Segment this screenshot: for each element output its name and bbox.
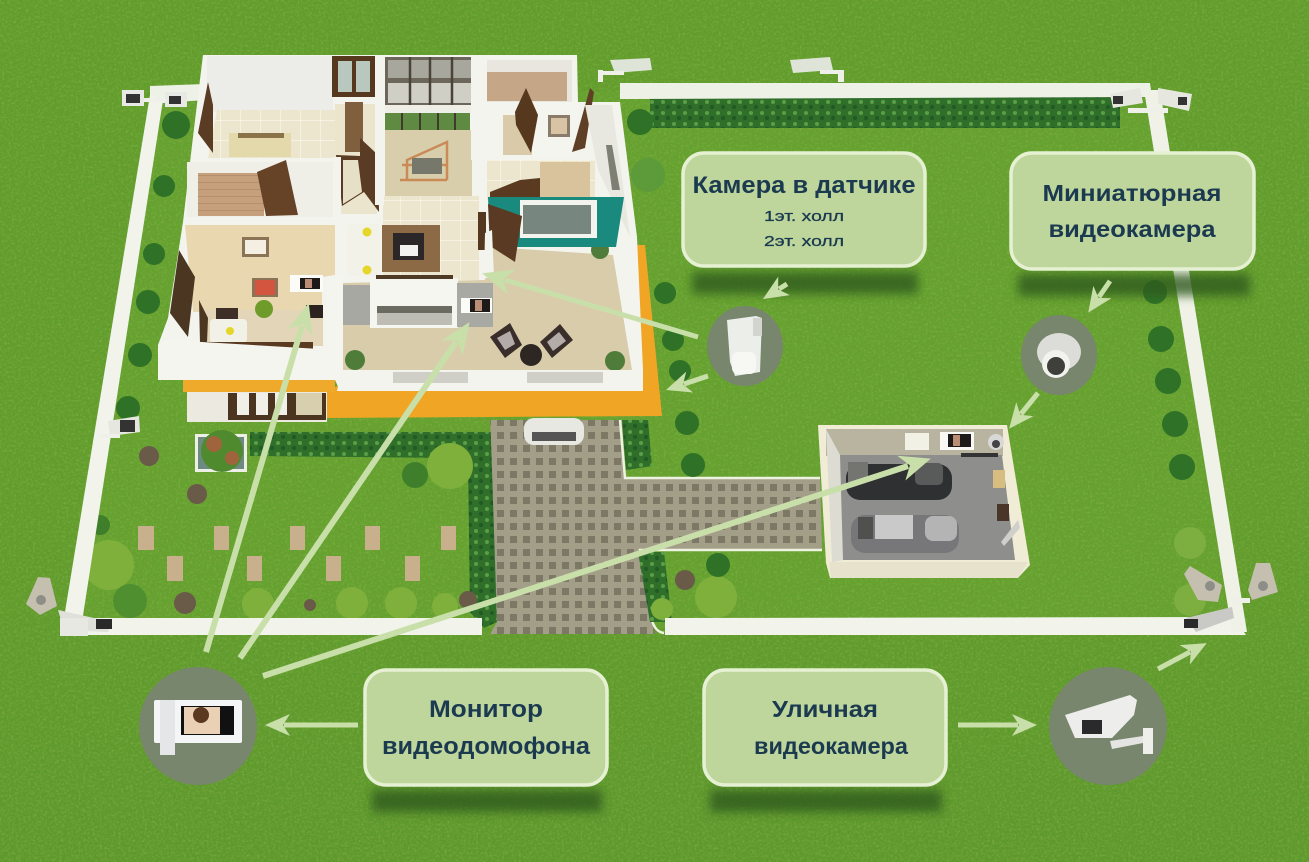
- video monitor: [290, 275, 323, 292]
- callout line 1: 1эт. холл: [764, 208, 844, 225]
- icon: sensor camera circle: [707, 306, 783, 386]
- bedroom wall: [207, 56, 333, 112]
- callout shadows: [372, 272, 1250, 812]
- arrow: street label to fence: [1158, 652, 1190, 669]
- arrow: monitor to garage: [263, 466, 908, 676]
- garden rocks: [139, 446, 477, 614]
- picture: [548, 115, 570, 137]
- callout line 2: 2эт. холл: [764, 233, 844, 250]
- teal wall: [488, 197, 624, 247]
- wall panels: [393, 372, 603, 383]
- hall floor: [383, 196, 479, 280]
- right room floor: [487, 160, 595, 200]
- flower bed: [195, 430, 247, 472]
- left door: [198, 82, 213, 153]
- dome: [1037, 333, 1081, 378]
- open door: [336, 138, 379, 212]
- grey block: [457, 283, 493, 327]
- wall: [185, 225, 335, 312]
- red picture: [252, 278, 278, 297]
- camera: bottom right: [1184, 563, 1278, 632]
- callout heading line 2: видеодомофона: [382, 733, 591, 760]
- back wall: [826, 429, 1003, 456]
- bath interior: [503, 115, 532, 155]
- driveway hedges: [622, 420, 672, 622]
- callout heading line 1: Миниатюрная: [1042, 180, 1222, 206]
- monitor device: [154, 700, 242, 755]
- mini camera: [988, 434, 1004, 450]
- outer door: [488, 204, 522, 262]
- window glass: [523, 205, 591, 234]
- bicycle: [961, 453, 998, 457]
- sofa: [347, 224, 380, 276]
- terrace: [327, 241, 643, 391]
- side wall interior: [585, 105, 630, 237]
- stair landing: [412, 158, 442, 174]
- window: [332, 56, 376, 97]
- callout: street camera: [704, 670, 946, 785]
- dark car: [846, 462, 952, 500]
- stepping stones: [138, 526, 456, 581]
- front garden: [84, 430, 497, 628]
- ground floor: [187, 390, 327, 422]
- orange plinth: [325, 245, 662, 418]
- parked car under house: [524, 418, 584, 445]
- arrow: monitor to terrace: [240, 342, 456, 658]
- fence: [62, 83, 1247, 635]
- upper window: [385, 57, 475, 105]
- garage: [818, 425, 1030, 578]
- staircase: [385, 130, 472, 196]
- house: [158, 55, 662, 445]
- arrow: label to monitor: [284, 722, 358, 728]
- camera housing: [1065, 695, 1153, 754]
- icon: dome camera circle: [1021, 315, 1097, 395]
- bushes: [116, 109, 1206, 620]
- paved driveway: [490, 420, 822, 634]
- bath floor: [487, 72, 567, 101]
- room: central passage: [335, 102, 379, 214]
- house shell: [158, 55, 643, 391]
- plant: [255, 300, 273, 318]
- boxes: [993, 470, 1020, 546]
- floor: [203, 310, 323, 346]
- video monitor: [940, 432, 974, 450]
- arrow: label to dome camera: [1099, 281, 1110, 297]
- fenced lawn: [66, 90, 1245, 628]
- door: [515, 88, 538, 153]
- video monitor: [461, 298, 492, 313]
- railing: [400, 142, 447, 180]
- partition: [532, 102, 577, 158]
- callout heading: Камера в датчике: [692, 172, 916, 199]
- picture: [242, 237, 269, 257]
- fence: top left stub: [150, 84, 205, 104]
- garden shrubs: [84, 443, 473, 620]
- fireplace: [343, 275, 458, 328]
- plants: [345, 241, 625, 371]
- callout: mini camera: [1011, 153, 1254, 269]
- side hedges and bushes: [116, 97, 1206, 620]
- terrace front wall: [337, 370, 643, 391]
- bed: [229, 133, 291, 157]
- staircase wood: [345, 102, 363, 152]
- orange strip: [183, 380, 335, 392]
- bedroom floor: [208, 110, 335, 158]
- callout heading line 2: видеокамера: [754, 733, 908, 759]
- garage floor: [840, 455, 1015, 560]
- front edge: [829, 562, 1028, 578]
- callout heading line 1: Монитор: [429, 696, 543, 723]
- sofa: [210, 308, 247, 343]
- fence: left: [62, 95, 163, 630]
- icon: street camera circle: [1049, 667, 1167, 785]
- camera: top 2: [790, 57, 844, 82]
- wall pier: [327, 277, 343, 372]
- post: [484, 230, 494, 278]
- callout: intercom monitor: [365, 670, 607, 785]
- camera: left: [100, 416, 140, 438]
- callout: sensor camera: [683, 153, 925, 266]
- room: living room: [170, 225, 335, 351]
- front bar: [207, 342, 313, 351]
- fence: bottom left: [62, 618, 482, 635]
- arrow: dome camera to garage: [1021, 393, 1038, 414]
- hedge: [250, 432, 497, 628]
- garage shell: [818, 425, 1030, 578]
- arrow: monitor to living room: [206, 326, 302, 652]
- tv stand: [306, 305, 323, 318]
- sensor body: [727, 316, 762, 376]
- silver car: [851, 515, 959, 553]
- arrow: sensor to hall: [505, 280, 698, 337]
- fence: top: [620, 83, 1152, 99]
- arrow: label to sensor: [779, 284, 787, 289]
- callout heading line 2: видеокамера: [1048, 216, 1216, 242]
- lower green window: [385, 105, 472, 131]
- door: [257, 160, 298, 216]
- rug: [382, 225, 440, 272]
- window frame: [520, 200, 597, 238]
- cameras on fence: [26, 57, 1278, 636]
- chairs and table: [490, 323, 573, 366]
- top hedge: [650, 97, 1120, 128]
- opening: [343, 160, 362, 204]
- camera: top 1: [598, 58, 652, 82]
- living room front wall: [158, 340, 340, 380]
- dark headboard: [490, 178, 540, 198]
- room: hall stairs: [347, 57, 479, 280]
- fence: bottom right: [665, 617, 1246, 635]
- door stub: [478, 212, 486, 250]
- bed: [540, 162, 590, 197]
- wood floor: [198, 173, 264, 216]
- icon: video intercom monitor circle: [139, 667, 257, 785]
- side window: [606, 145, 620, 190]
- camera: bottom left: [26, 577, 112, 636]
- arrow: sensor to first floor: [684, 376, 708, 384]
- camera: top right: [1110, 88, 1192, 113]
- fence: right: [1144, 90, 1247, 632]
- terrace floor: [342, 247, 632, 370]
- camera: top left: [122, 90, 187, 107]
- room: small room: [187, 160, 333, 217]
- window: [905, 433, 929, 450]
- bathroom: [487, 60, 572, 102]
- arrow: label to street camera: [958, 722, 1018, 728]
- right wing: [478, 60, 630, 278]
- right door: [572, 88, 594, 152]
- room: bedroom: [198, 56, 376, 158]
- callout heading line 1: Уличная: [772, 696, 878, 722]
- left wall: [826, 429, 844, 562]
- walls: [333, 55, 487, 223]
- driveway kerbs: [620, 420, 822, 633]
- left windows: [170, 250, 208, 343]
